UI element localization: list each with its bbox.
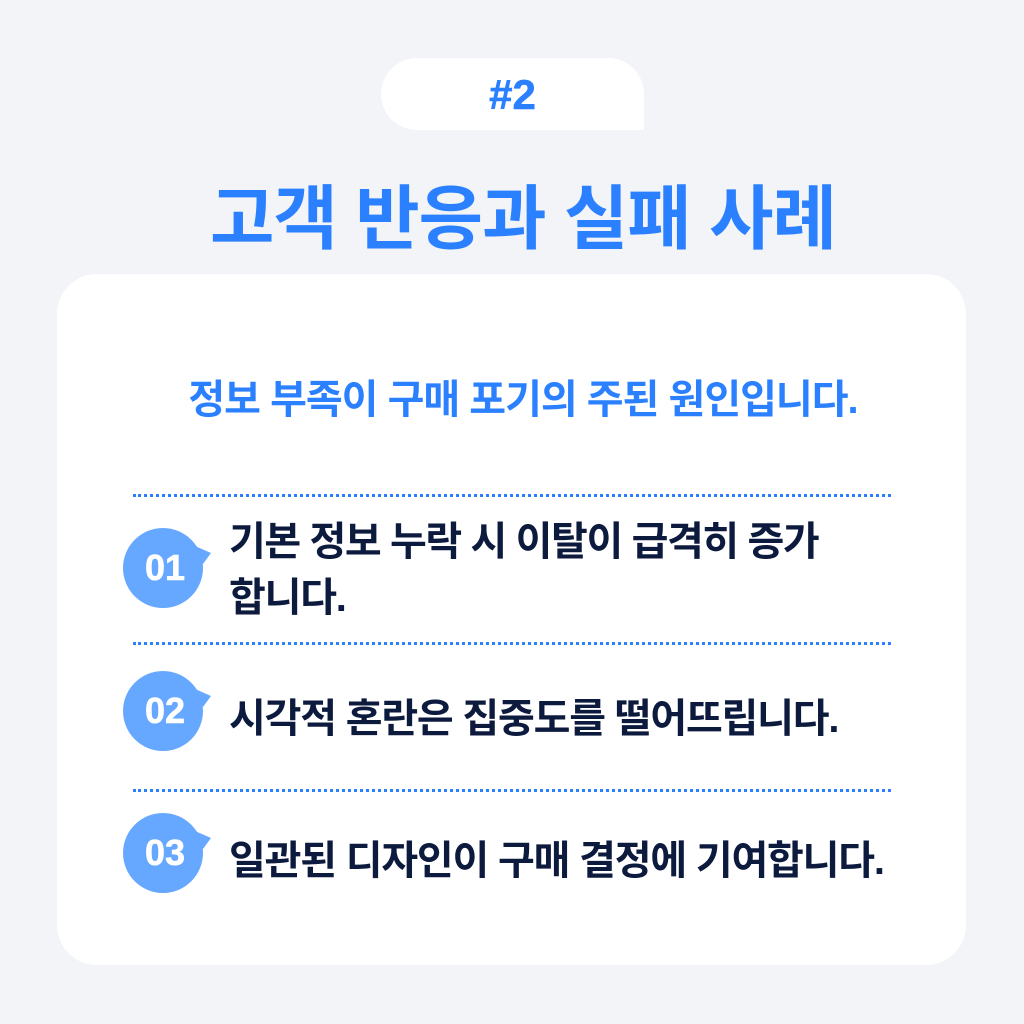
item 1 text: 기본 정보 누락 시 이탈이 급격히 증가 bbox=[229, 520, 818, 564]
tag: #2 bbox=[381, 58, 644, 130]
item 1 text bbox=[229, 520, 819, 620]
item 3 text: 일관된 디자인이 구매 결정에 기여합니다. bbox=[229, 839, 884, 883]
item 1 text: 합니다. bbox=[229, 576, 346, 620]
icon: badge 03 bbox=[123, 813, 211, 893]
icon: badge 01: 01 bbox=[145, 547, 185, 588]
item 2 text: 시각적 혼란은 집중도를 떨어뜨립니다. bbox=[229, 697, 838, 741]
icon: badge 01 bbox=[123, 528, 211, 608]
title: 고객 반응과 실패 사례 bbox=[210, 180, 836, 258]
icon: badge 03: 03 bbox=[145, 832, 185, 873]
subtitle: 정보 부족이 구매 포기의 주된 원인입니다. bbox=[188, 378, 858, 422]
icon: badge 02: 02 bbox=[145, 690, 185, 731]
tag: #2: #2 bbox=[489, 71, 536, 118]
panel: content card bbox=[57, 274, 966, 965]
icon: badge 02 bbox=[123, 671, 211, 751]
